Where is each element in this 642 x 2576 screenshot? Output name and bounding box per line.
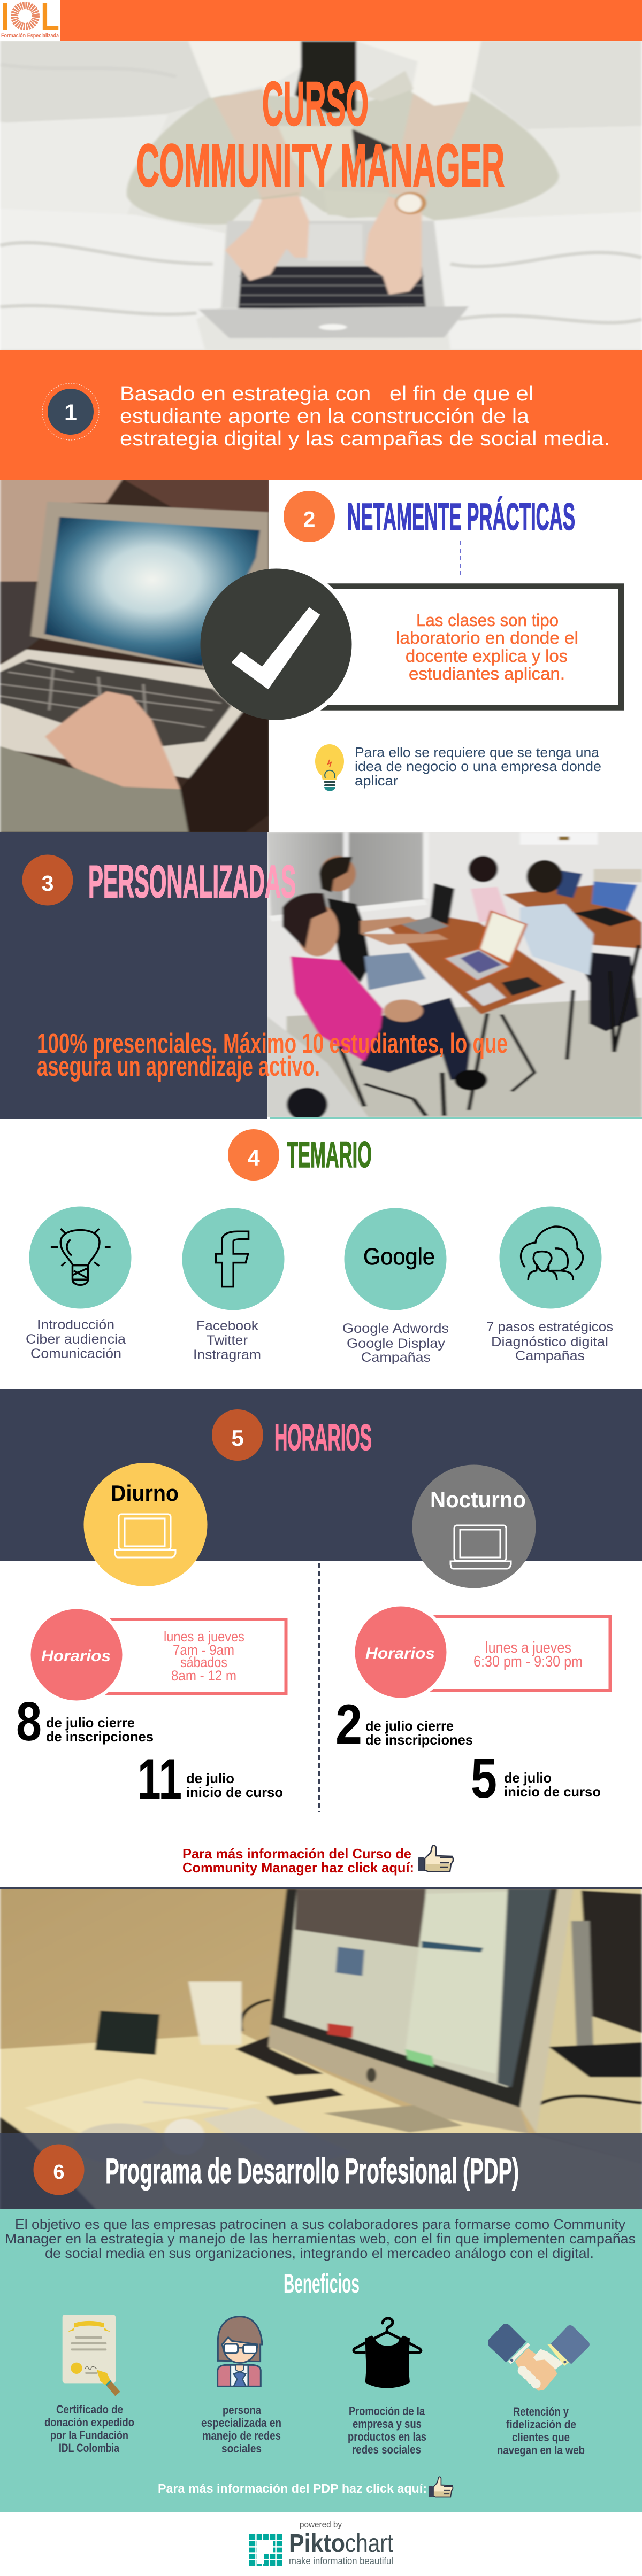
header band [0,0,642,41]
benefit text 3: redes sociales [352,2443,421,2456]
date: 8 de julio: 8 [16,1691,42,1752]
title: CURSO [262,69,369,138]
intro text: estrategia digital y las campañas de social media. [120,428,610,450]
text: 100% presenciales: asegura un aprendizaje activo. [37,1051,320,1082]
icon: certificate [63,2315,120,2396]
logo: IOL Formación Especializada [0,0,60,41]
icon: google circle: Google [363,1244,435,1270]
benefit text 4: fidelización de [506,2418,576,2431]
divider bar [0,1887,642,1889]
topic list 3: Google Adwords [342,1321,449,1336]
date: 8 de julio: de inscripciones [46,1729,154,1745]
text: 100% presenciales [37,1028,508,1082]
note: business idea: aplicar [355,773,398,789]
topic list 3 [342,1321,449,1365]
intro text: Basado en estrategia con el fin de que el [120,383,533,405]
icon: thumbs up [418,1845,453,1871]
panel 5: horarios [0,1389,642,1876]
icon: laptop [450,1525,511,1569]
footer: powered by piktochart: powered by [300,2519,342,2529]
badge 2: 2 [303,507,315,531]
benefit text 2: manejo de redes [202,2429,281,2442]
diurno schedule box: 7am - 9am [173,1642,234,1658]
date: 5 de julio: de julio [504,1770,552,1786]
benefit text 4: clientes que [512,2431,570,2444]
panel 6 photo: iMac on desk [0,1887,642,2211]
benefit text 1: donación expedido [44,2416,134,2429]
footer: powered by piktochart [249,2519,393,2566]
date: 5 de julio: 5 [471,1747,497,1810]
date: 11 de julio: de julio [186,1770,234,1786]
text: laboratorio [396,611,578,683]
topic list 2: Twitter [207,1333,248,1348]
title [136,69,505,199]
diurno schedule box: Horarios [41,1647,111,1665]
objective paragraph [5,2216,636,2261]
badge 6 [33,2144,85,2195]
panel: benefits [0,2209,642,2512]
benefit text 4: navegan en la web [497,2443,585,2457]
date: 11 de julio [137,1747,283,1811]
nocturno schedule box: Horarios [365,1645,435,1662]
note: business idea [355,744,601,789]
footer: powered by piktochart: chart [345,2529,393,2558]
hero photo: woman with laptop on bed [0,30,642,356]
check circle [200,569,352,720]
benefit text 4 [497,2405,585,2457]
diurno badge [83,1463,208,1586]
benefit text 3: empresa y sus [353,2417,422,2431]
date: 2 de julio: 2 [335,1693,362,1756]
intro text [120,383,610,450]
icon: facebook circle [182,1208,285,1310]
benefit text 2 [201,2403,281,2455]
nocturno badge: Nocturno [430,1487,526,1512]
badge 2 [284,491,335,542]
icon: thumbs up small [429,2477,453,2497]
topic list 3: Google Display [347,1336,446,1351]
benefit text 1: por la Fundación [50,2428,128,2442]
icon: light bulb [315,744,344,791]
benefit text 4: Retención y [513,2405,569,2418]
topic list 1: Introducción [37,1317,114,1332]
classroom photo [262,829,642,1121]
date: 2 de julio: de julio cierre [365,1718,454,1734]
panel 3: personalizadas: PERSONALIZADAS [88,857,296,907]
badge 5 [212,1409,263,1461]
note: business idea: idea de negocio o una empresa donde [355,758,601,774]
topic list 3: Campañas [361,1350,431,1365]
icon: piktochart logo [249,2534,282,2566]
icon: handshake [488,2324,590,2391]
heading: beneficios: Beneficios [284,2269,360,2299]
call to action: pdp: Para más información del PDP haz click aquí: [158,2481,427,2495]
nocturno badge [412,1465,536,1588]
benefit text 1: IDL Colombia [59,2441,120,2455]
badge 6: 6 [53,2161,65,2184]
badge 4: 4 [247,1145,260,1170]
footer: powered by piktochart: Pikto [289,2529,345,2558]
benefit text 2: especializada en [201,2416,281,2430]
nocturno schedule box: lunes a jueves [485,1639,571,1656]
teal strip [270,1117,642,1119]
benefit text 3: productos en las [348,2430,426,2443]
footer: powered by piktochart: make information beautiful [289,2556,393,2566]
panel 6: title band [0,2133,642,2209]
icon: audience cloud circle [500,1206,601,1309]
text: laboratorio: Las clases son tipo [416,611,559,630]
panel 5: horarios: HORARIOS [274,1417,372,1458]
badge 1 [42,383,99,440]
objective paragraph: Manager en la estrategia y manejo de las herramientas web, con el fin que implementen campañas [5,2231,636,2247]
badge 5: 5 [231,1425,244,1451]
diurno schedule box [0,1604,286,1706]
icon: light bulb circle [29,1206,132,1309]
date: 5 de julio: inicio de curso [504,1784,601,1800]
diurno schedule box: lunes a jueves [164,1629,244,1645]
date: 2 de julio [335,1693,473,1756]
panel 4: temario [26,1129,613,1365]
date: 11 de julio: 11 [137,1747,182,1811]
diurno schedule box: sábados [180,1654,227,1670]
panel 1: strategy intro [0,350,642,480]
topic list 2 [193,1318,261,1362]
callout box [196,565,621,724]
topic list 1: Comunicación [30,1346,121,1361]
benefit text 3 [348,2404,426,2456]
topic list 2: Instragram [193,1347,261,1362]
nocturno schedule box [351,1603,610,1701]
note: business idea: Para ello se requiere que se tenga una [355,744,600,760]
topic list 4: Diagnóstico digital [491,1335,608,1349]
diurno badge: Diurno [111,1480,179,1506]
benefit text 1 [44,2403,134,2455]
date: 2 de julio: de inscripciones [365,1732,473,1748]
badge 4 [228,1129,279,1181]
topic list 2: Facebook [196,1318,259,1333]
topic list 4 [486,1320,613,1363]
objective paragraph: de social media en sus organizaciones, integrando el mercadeo análogo con el digital. [45,2245,594,2261]
topic list 1 [26,1317,126,1361]
date: 11 de julio: inicio de curso [186,1784,283,1800]
panel 4: temario: TEMARIO [287,1134,372,1175]
badge 3 [22,854,73,906]
objective paragraph: El objetivo es que las empresas patrocinen a sus colaboradores para formarse como Community [15,2216,625,2232]
benefit text 2: sociales [221,2442,262,2455]
icon: specialist person [218,2317,262,2386]
date: 8 de julio: de julio cierre [46,1715,135,1731]
topic list 4: 7 pasos estratégicos [486,1320,613,1335]
icon: shirt on hanger [354,2318,421,2388]
panel 2 photo: laptop with hand [0,479,270,835]
text: laboratorio: laboratorio en donde el [396,628,578,647]
diurno schedule box: 8am - 12 m [171,1668,236,1684]
panel 2: netamente prácticas [284,491,575,577]
call to action: curso: Para más información del Curso de [182,1846,411,1862]
topic list 4: Campañas [515,1348,585,1363]
badge 1: 1 [64,400,77,426]
icon: laptop [115,1514,175,1557]
icon: google circle [345,1208,446,1310]
text: laboratorio: estudiantes aplican. [409,664,565,683]
logo: IOL Formación Especializada: Formación Especializada [1,33,59,39]
benefit text 1: Certificado de [56,2403,123,2416]
call to action: curso: Community Manager haz click aquí: [182,1860,414,1876]
badge 3: 3 [42,871,54,896]
topic list 1: Ciber audiencia [26,1332,126,1347]
date: 8 de julio [16,1691,154,1752]
date: 5 de julio [471,1747,601,1810]
nocturno schedule box: 6:30 pm - 9:30 pm [473,1653,583,1670]
benefit text 3: Promoción de la [349,2404,425,2418]
call to action: curso [182,1846,414,1876]
intro text: estudiante aporte en la construcción de la [120,405,530,428]
benefit text 2: persona [223,2403,262,2417]
text: laboratorio: docente explica y los [406,646,568,666]
panel 3: personalizadas [0,829,642,1121]
